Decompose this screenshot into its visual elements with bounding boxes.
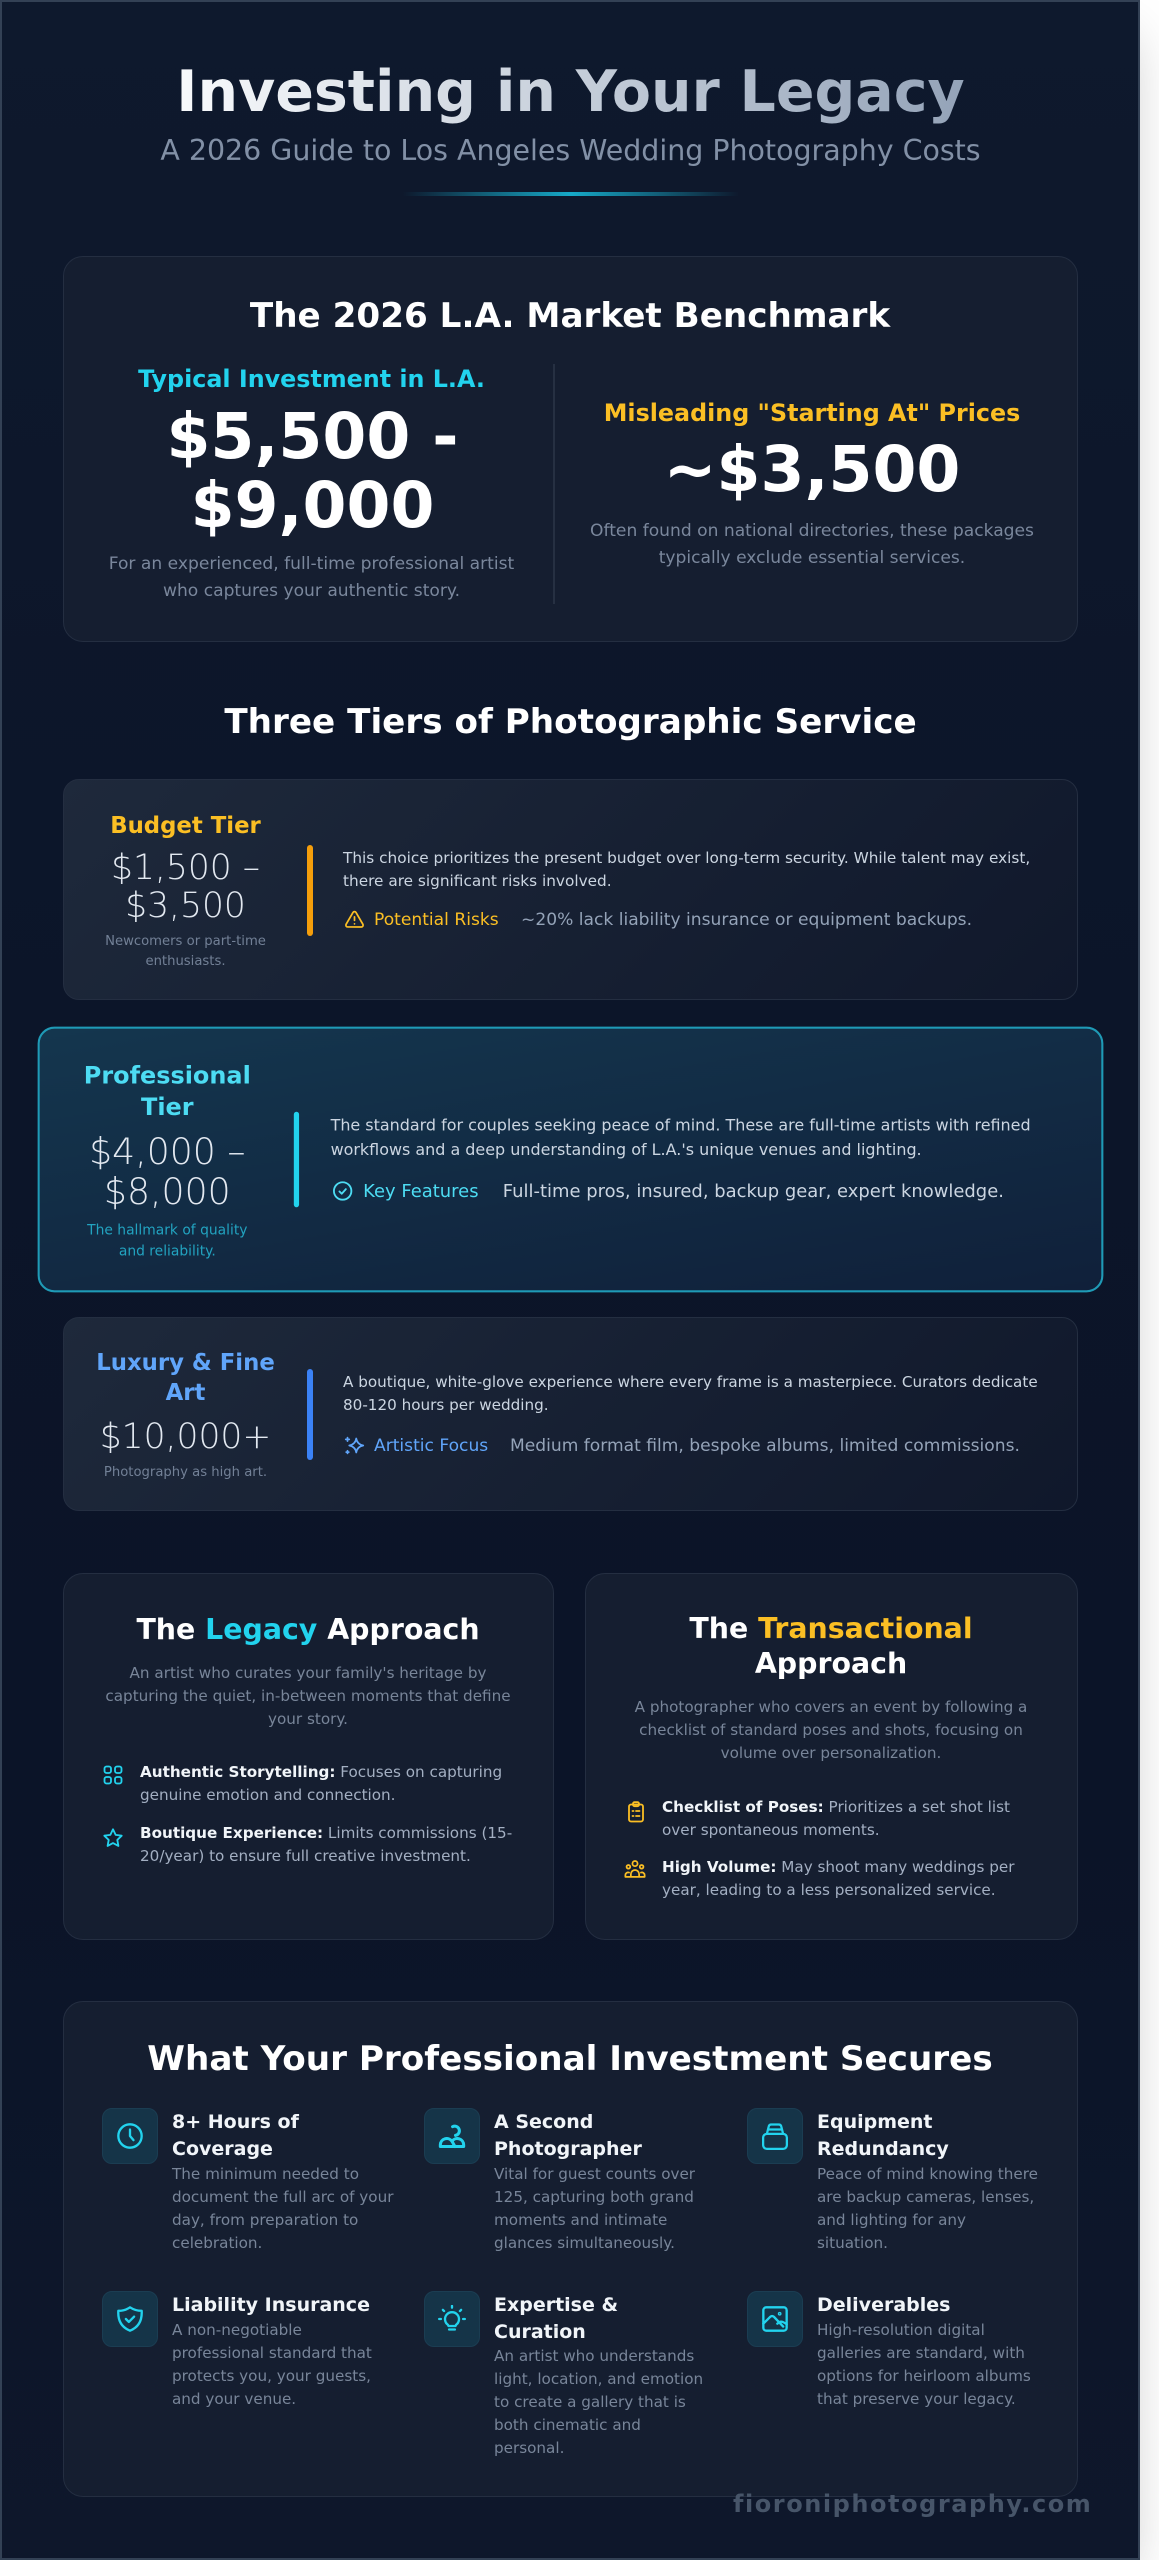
heading: benchmark: The 2026 L.A. Market Benchmark bbox=[250, 296, 890, 336]
list item: high volume bbox=[624, 1858, 1014, 1899]
list text bbox=[140, 1763, 502, 1804]
tier note bbox=[87, 1223, 247, 1259]
heading: transactional bbox=[689, 1612, 973, 1680]
tier note: Newcomers or part-time bbox=[105, 934, 266, 949]
tier description: 80-120 hours per wedding. bbox=[343, 1396, 549, 1414]
feature text: The minimum needed to bbox=[172, 2165, 359, 2183]
stat description: Often found on national directories, these packages bbox=[590, 521, 1034, 541]
feature: coverage bbox=[102, 2108, 394, 2252]
panel: market benchmark bbox=[63, 256, 1078, 642]
tier description: This choice prioritizes the present budget over long-term security. While talent may exist, bbox=[343, 849, 1030, 867]
description: capturing the quiet, in-between moments that define bbox=[105, 1687, 511, 1705]
feature text: Peace of mind knowing there bbox=[817, 2165, 1038, 2183]
panel: transactional approach bbox=[585, 1573, 1078, 1940]
list text: Authentic Storytelling: Focuses on capturing bbox=[140, 1763, 502, 1781]
stat description: typically exclude essential services. bbox=[659, 548, 965, 568]
description: your story. bbox=[268, 1710, 348, 1728]
feature text: document the full arc of your bbox=[172, 2188, 393, 2206]
list text: year, leading to a less personalized service. bbox=[662, 1881, 996, 1899]
feature text: moments and intimate bbox=[494, 2211, 667, 2229]
description bbox=[105, 1664, 511, 1728]
heading: investment secures: What Your Professional Investment Secures bbox=[147, 2039, 993, 2079]
icon box: equipment bbox=[747, 2108, 803, 2164]
left stat: typical investment bbox=[109, 365, 514, 600]
stat value: $9,000 bbox=[191, 468, 434, 542]
feature text bbox=[817, 2163, 1038, 2255]
accent bar bbox=[307, 1369, 313, 1460]
tier name: Luxury & Fine bbox=[96, 1350, 275, 1376]
feature text: to create a gallery that is bbox=[494, 2393, 686, 2411]
tier description: A boutique, white-glove experience where every frame is a masterpiece. Curators dedicate bbox=[343, 1373, 1038, 1391]
stat label: Misleading "Starting At" Prices bbox=[604, 399, 1020, 427]
tier name bbox=[84, 1062, 251, 1121]
tier name: Budget Tier bbox=[110, 813, 261, 839]
tier description bbox=[342, 849, 1030, 890]
feature title bbox=[172, 2111, 300, 2160]
tier note: The hallmark of quality bbox=[87, 1223, 247, 1238]
stat description: who captures your authentic story. bbox=[163, 580, 460, 600]
icon box: photographers bbox=[424, 2108, 480, 2164]
heading: legacy: The Legacy Approach bbox=[136, 1613, 480, 1646]
feature label: Potential Risks bbox=[374, 910, 499, 930]
feature text: day, from preparation to bbox=[172, 2211, 358, 2229]
right stat: starting at prices bbox=[590, 399, 1034, 568]
feature title bbox=[494, 2109, 642, 2163]
feature: second photographer bbox=[424, 2108, 724, 2268]
tier price: $4,000 – bbox=[89, 1131, 245, 1173]
icon box: shield bbox=[102, 2291, 158, 2347]
feature text: High-resolution digital bbox=[817, 2321, 985, 2339]
feature text: personal. bbox=[494, 2439, 564, 2457]
feature text: are backup cameras, lenses, bbox=[817, 2188, 1034, 2206]
vertical divider bbox=[553, 364, 554, 604]
description: volume over personalization. bbox=[721, 1744, 941, 1762]
list text: 20/year) to ensure full creative investment. bbox=[140, 1846, 471, 1864]
icon: star bbox=[103, 1828, 123, 1847]
tier note: and reliability. bbox=[119, 1243, 216, 1259]
feature: expertise and curation bbox=[424, 2291, 724, 2481]
feature text: light, location, and emotion bbox=[494, 2370, 703, 2388]
list item: boutique experience bbox=[103, 1824, 512, 1864]
panel: luxury tier bbox=[63, 1317, 1078, 1511]
feature title: Photographer bbox=[494, 2138, 642, 2160]
feature text: Vital for guest counts over bbox=[494, 2165, 695, 2183]
feature title: Equipment bbox=[817, 2111, 933, 2133]
list text bbox=[662, 1858, 1014, 1899]
icon: clipboard bbox=[628, 1801, 644, 1822]
description: An artist who curates your family's heritage by bbox=[130, 1664, 486, 1682]
tier price: $8,000 bbox=[104, 1171, 231, 1213]
header divider bbox=[403, 192, 739, 196]
feature text bbox=[494, 2345, 703, 2460]
feature title: Redundancy bbox=[817, 2138, 949, 2160]
feature: equipment redundancy bbox=[747, 2108, 1047, 2268]
tier price: $10,000+ bbox=[100, 1417, 271, 1457]
stat label: Typical Investment in L.A. bbox=[138, 365, 485, 393]
stat description: For an experienced, full-time professional artist bbox=[109, 554, 514, 574]
tier feature row bbox=[344, 1436, 1020, 1456]
feature label: Artistic Focus bbox=[374, 1436, 488, 1456]
tier description: there are significant risks involved. bbox=[343, 872, 612, 890]
feature text: 125, capturing both grand bbox=[494, 2188, 694, 2206]
tier description bbox=[330, 1115, 1031, 1158]
watermark: fioroniphotography.com bbox=[733, 2490, 1092, 2518]
tier price bbox=[89, 1131, 245, 1213]
tier name: Professional bbox=[84, 1062, 251, 1089]
feature text: professional standard that bbox=[172, 2344, 372, 2362]
feature text: both cinematic and bbox=[494, 2416, 641, 2434]
subtitle: A 2026 Guide to Los Angeles Wedding Photography Costs bbox=[160, 134, 981, 167]
list item: checklist of poses bbox=[628, 1798, 1010, 1838]
feature title: Curation bbox=[494, 2321, 586, 2343]
icon: sparkles bbox=[344, 1436, 364, 1454]
icon: circle check bbox=[333, 1181, 352, 1201]
feature title: Liability Insurance bbox=[172, 2294, 370, 2316]
feature text: and your venue. bbox=[172, 2390, 296, 2408]
tier price: $3,500 bbox=[125, 886, 246, 926]
tier name: Tier bbox=[141, 1093, 194, 1121]
feature: liability insurance bbox=[102, 2291, 402, 2451]
stat value: $5,500 - bbox=[166, 399, 459, 473]
heading: transactional: Approach bbox=[755, 1646, 907, 1680]
panel: professional tier bbox=[38, 1026, 1103, 1292]
stat description bbox=[590, 521, 1034, 568]
tier feature row bbox=[333, 1181, 1004, 1202]
tier name bbox=[96, 1350, 275, 1406]
tier name: Art bbox=[166, 1380, 205, 1406]
icon: warning triangle bbox=[345, 910, 364, 928]
heading: transactional: The Transactional bbox=[689, 1612, 973, 1645]
feature value: Medium format film, bespoke albums, limited commissions. bbox=[510, 1436, 1020, 1456]
icon box: image bbox=[747, 2291, 803, 2347]
feature text: A non-negotiable bbox=[172, 2321, 302, 2339]
feature value: ~20% lack liability insurance or equipment backups. bbox=[521, 910, 972, 930]
list text bbox=[662, 1798, 1010, 1838]
feature title bbox=[494, 2292, 618, 2346]
tier note bbox=[105, 934, 266, 968]
accent bar bbox=[294, 1111, 299, 1207]
feature text: An artist who understands bbox=[494, 2347, 694, 2365]
icon box: clock bbox=[102, 2108, 158, 2164]
stat value: ~$3,500 bbox=[664, 432, 960, 506]
panel: what your investment secures bbox=[63, 2001, 1078, 2497]
description: checklist of standard poses and shots, focusing on bbox=[639, 1721, 1023, 1739]
tier note: Photography as high art. bbox=[104, 1465, 267, 1480]
list text: Checklist of Poses: Prioritizes a set shot list bbox=[662, 1798, 1010, 1816]
feature title: 8+ Hours of bbox=[172, 2111, 299, 2133]
stat value bbox=[166, 399, 459, 542]
feature text bbox=[172, 2319, 372, 2411]
feature title: Expertise & bbox=[494, 2294, 618, 2316]
header bbox=[160, 59, 981, 196]
tier feature row bbox=[345, 910, 972, 930]
description bbox=[634, 1698, 1027, 1762]
panel: budget tier bbox=[63, 779, 1078, 1000]
tier note: enthusiasts. bbox=[145, 954, 226, 968]
accent bar bbox=[307, 845, 313, 936]
icon: grid bbox=[104, 1766, 122, 1784]
feature text bbox=[817, 2319, 1031, 2411]
feature title: Deliverables bbox=[817, 2294, 950, 2316]
feature text: and lighting for any bbox=[817, 2211, 966, 2229]
description: A photographer who covers an event by following a bbox=[635, 1698, 1027, 1716]
feature text: that preserve your legacy. bbox=[817, 2390, 1016, 2408]
feature text: glances simultaneously. bbox=[494, 2234, 675, 2252]
tier description bbox=[343, 1373, 1038, 1414]
feature text: situation. bbox=[817, 2234, 888, 2252]
feature text bbox=[494, 2163, 695, 2255]
list item: authentic storytelling bbox=[104, 1763, 502, 1804]
feature text bbox=[172, 2163, 393, 2255]
feature text: options for heirloom albums bbox=[817, 2367, 1031, 2385]
list text: High Volume: May shoot many weddings per bbox=[662, 1858, 1014, 1876]
title: Investing in Your Legacy bbox=[176, 59, 965, 125]
tier price bbox=[111, 848, 260, 926]
feature title: A Second bbox=[494, 2111, 593, 2133]
icon box: bulb bbox=[424, 2291, 480, 2347]
feature title: Coverage bbox=[172, 2138, 273, 2160]
list text bbox=[140, 1824, 512, 1864]
feature: deliverables bbox=[747, 2291, 1047, 2451]
icon: people bbox=[624, 1860, 646, 1878]
tier description: The standard for couples seeking peace of mind. These are full-time artists with refined bbox=[331, 1115, 1031, 1134]
list text: genuine emotion and connection. bbox=[140, 1786, 396, 1804]
feature text: protects you, your guests, bbox=[172, 2367, 371, 2385]
feature text: celebration. bbox=[172, 2234, 262, 2252]
tier price: $1,500 – bbox=[111, 848, 260, 888]
heading: three tiers: Three Tiers of Photographic Service bbox=[224, 702, 917, 742]
feature value: Full-time pros, insured, backup gear, expert knowledge. bbox=[503, 1181, 1004, 1202]
list text: Boutique Experience: Limits commissions (15- bbox=[140, 1824, 512, 1842]
panel: legacy approach bbox=[63, 1573, 554, 1940]
feature label: Key Features bbox=[363, 1181, 479, 1202]
feature title bbox=[817, 2109, 949, 2163]
stat description bbox=[109, 554, 514, 600]
list text: over spontaneous moments. bbox=[662, 1820, 880, 1838]
tier description: workflows and a deep understanding of L.A.'s unique venues and lighting. bbox=[331, 1140, 922, 1158]
feature text: galleries are standard, with bbox=[817, 2344, 1025, 2362]
